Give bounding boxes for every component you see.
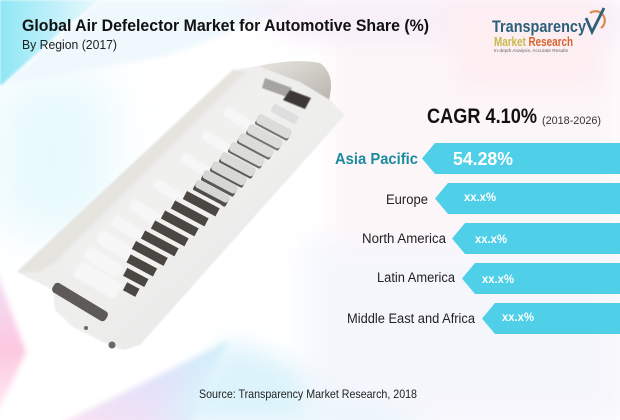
CAGR heading: CAGR 4.10% <box>427 105 537 128</box>
vent dark slots <box>123 187 222 297</box>
bar: Asia Pacific <box>335 143 620 174</box>
source: Source: Transparency Market Research, 2018 <box>199 387 417 401</box>
vent left rim <box>17 70 246 272</box>
bar: North America <box>362 223 620 254</box>
vent dome <box>258 61 331 102</box>
bar: Latin America: xx.x% <box>482 272 514 286</box>
bar: Middle East and Africa: Middle East and Africa <box>347 311 475 326</box>
bar: Europe: Europe <box>386 192 428 207</box>
vent dark bar <box>51 281 109 323</box>
vent light slats <box>192 103 299 207</box>
logo: Transparency Market Research <box>492 8 605 53</box>
bar: Asia Pacific: Asia Pacific <box>335 151 418 168</box>
vent flaps panel <box>60 72 292 290</box>
bar: Europe <box>386 183 620 214</box>
logo: Transparency Market Research: Transparency <box>492 17 586 36</box>
logo: Transparency Market Research: In-depth Analysis. Accurate Results <box>494 48 569 53</box>
subtitle: By Region (2017) <box>22 37 117 52</box>
bar: North America: North America <box>362 231 446 246</box>
vent dark block <box>283 90 311 109</box>
bar: Asia Pacific: 54.28% <box>453 149 513 169</box>
bar: Latin America: Latin America <box>377 270 455 285</box>
vent wavy flaps <box>73 106 258 300</box>
bar: Middle East and Africa: xx.x% <box>502 310 534 324</box>
bar: North America: xx.x% <box>475 232 507 246</box>
vent plate <box>17 66 345 350</box>
vent screw holes <box>84 326 116 348</box>
title: Global Air Defelector Market for Automotive Share (%) <box>22 16 429 35</box>
CAGR heading: (2018-2026) <box>542 115 601 127</box>
bar: Latin America <box>377 263 620 294</box>
vent grey block <box>262 78 292 97</box>
bar: Middle East and Africa <box>347 303 620 334</box>
logo: Transparency Market Research: Market Research <box>494 35 573 49</box>
bar: Europe: xx.x% <box>464 190 496 204</box>
product photo: air deflector vent <box>17 61 345 350</box>
